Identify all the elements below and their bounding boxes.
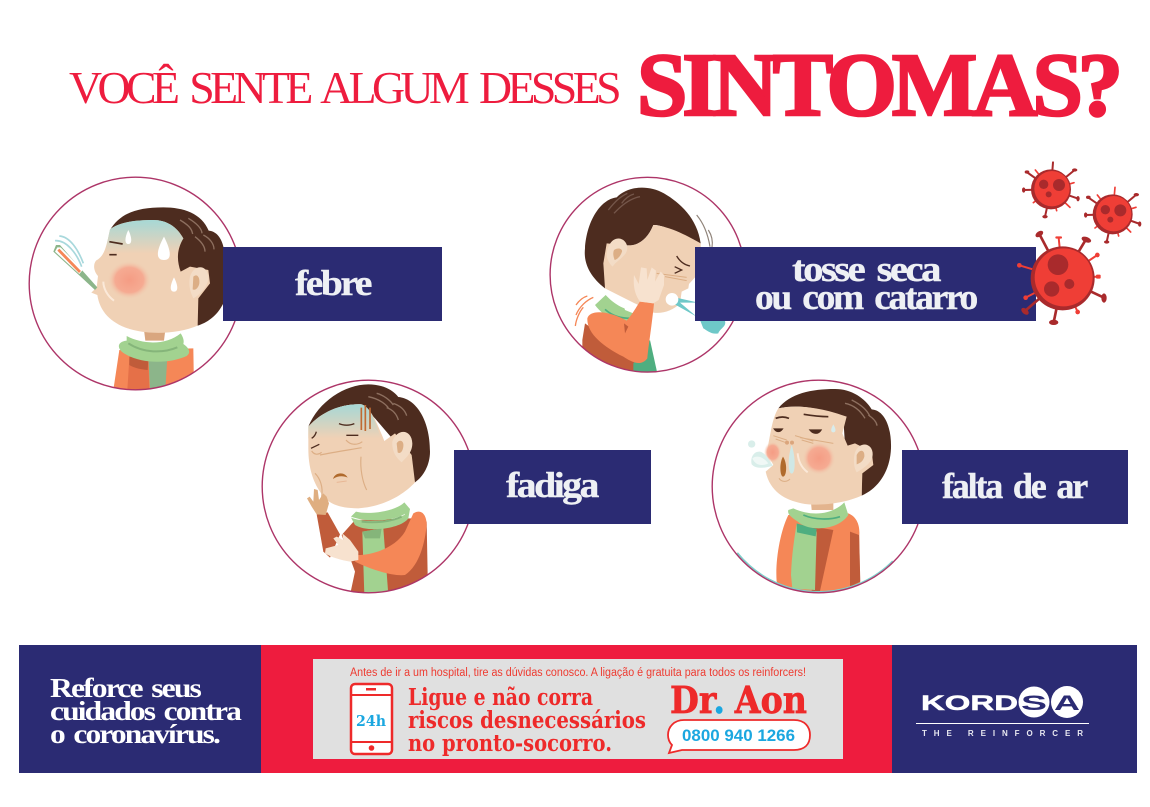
illustration: boy with thermometer xyxy=(53,207,225,390)
panel: falta de ar xyxy=(712,380,1128,595)
icon: coronavirus cluster xyxy=(1017,162,1141,325)
icon: virus small right xyxy=(1084,187,1141,244)
label text: falta de ar: falta de ar xyxy=(942,466,1088,506)
footer panel: reforce: cuidados contra xyxy=(50,696,242,726)
footer panel: dr aon ad xyxy=(261,645,892,773)
phone number bubble: 0800 940 1266 xyxy=(682,726,795,745)
footer panel: kordsa xyxy=(892,645,1137,773)
dr aon logo: Dr. Aon xyxy=(670,678,807,722)
ad headline: riscos desnecessários xyxy=(408,707,646,734)
circle outline xyxy=(262,380,475,593)
label text: tosse seca ou com catarro: tosse seca xyxy=(792,249,941,289)
label box: fadiga xyxy=(454,450,651,524)
footer panel: reforce: Reforce seus xyxy=(50,673,201,703)
illustration: boy short of breath xyxy=(737,389,893,595)
illustration: boy coughing xyxy=(575,188,725,373)
label text: tosse seca ou com catarro: ou com catarro xyxy=(755,277,977,317)
ad headline: no pronto-socorro. xyxy=(408,730,612,757)
kordsa logo: S xyxy=(1021,692,1047,715)
phone number bubble xyxy=(668,720,810,753)
title: você sente algum desses: VOCÊ SENTE ALGUM DESSES xyxy=(69,62,619,113)
circle outline xyxy=(712,380,925,593)
panel: febre xyxy=(29,177,442,390)
icon: virus small left xyxy=(1022,162,1080,218)
label text: tosse seca ou com catarro xyxy=(755,249,977,317)
kordsa logo: THE REINFORCER xyxy=(922,729,1083,738)
label text: fadiga: fadiga xyxy=(506,465,599,505)
ad headline xyxy=(408,684,646,757)
label box: tosse xyxy=(695,247,1036,321)
kordsa logo: KORD xyxy=(921,692,1018,715)
circle outline xyxy=(550,177,745,372)
circle outline xyxy=(29,177,242,390)
icon: phone 24h xyxy=(351,684,392,754)
label box: falta de ar xyxy=(902,450,1128,524)
footer panel: reforce xyxy=(19,645,261,773)
footer panel: reforce: o coronavírus. xyxy=(50,719,220,749)
ad headline: Ligue e não corra xyxy=(408,684,593,711)
title: sintomas: SINTOMAS? xyxy=(637,36,1118,135)
panel: tosse xyxy=(550,177,1036,373)
label text: febre: febre xyxy=(295,263,372,303)
icon: virus large xyxy=(1017,229,1107,325)
kordsa logo xyxy=(916,686,1089,738)
kordsa logo: A xyxy=(1054,692,1080,715)
illustration: tired boy xyxy=(307,384,430,595)
footer banner xyxy=(19,645,1137,773)
ad note: Antes de ir a um hospital, tire as dúvidas conosco. A ligação é gratuita para todos os reinforcers! xyxy=(350,667,806,679)
icon: phone 24h: 24h xyxy=(356,712,386,730)
label box: febre xyxy=(223,247,442,321)
panel: fadiga xyxy=(262,380,651,595)
